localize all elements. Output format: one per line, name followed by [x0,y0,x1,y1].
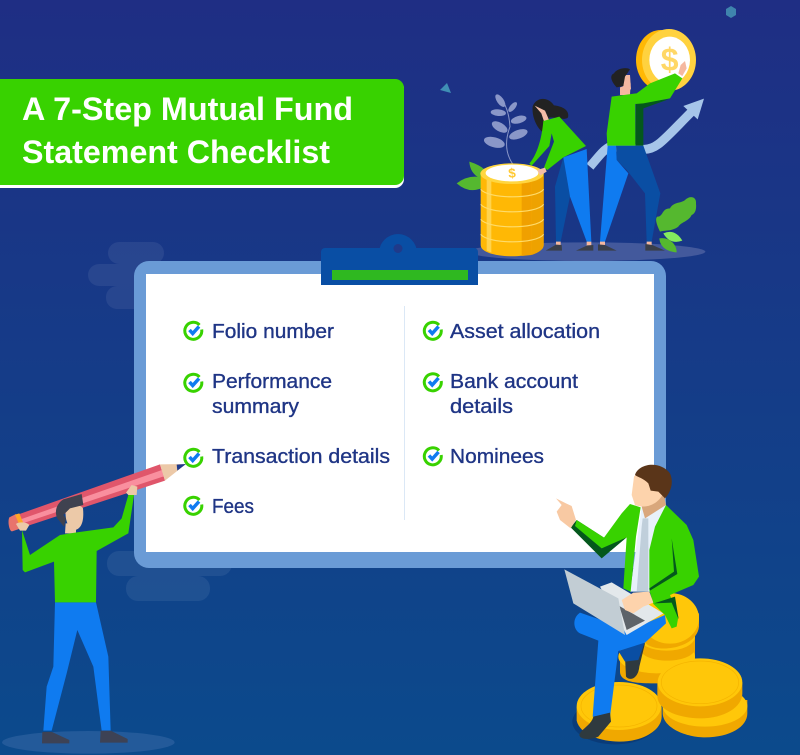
check icon: performance summary [185,374,202,391]
clipboard clip [321,234,478,285]
back shoe [625,640,645,679]
sweater [22,495,134,602]
jacket [571,504,699,628]
checklist: right column [424,320,600,468]
item: fees: Fees [212,495,254,518]
background clouds: lower left [107,551,232,601]
front shoe [579,713,611,739]
checklist: left column [185,320,390,518]
decorative triangle [440,83,451,93]
decorative hexagon [726,6,736,18]
pointing hand [556,498,576,528]
shoes [42,731,128,743]
ground shadow [2,731,175,754]
item: folio number: Folio number [212,320,334,343]
illustration: man carrying pencil [2,464,186,754]
typing hand [622,592,653,613]
shirt and tie [630,505,666,592]
item: performance summary: Performance [212,370,332,393]
man lifting coin [598,29,696,251]
illustration: man with laptop on coins [556,465,747,744]
pencil [9,464,186,531]
item: bank account details: Bank account [450,370,578,393]
woman [529,99,593,251]
item: asset allocation: Asset allocation [450,320,600,343]
green leaves behind coins [457,162,485,190]
clipboard board [134,261,666,568]
check icon: transaction details [185,449,202,466]
trousers [574,613,666,717]
neck [642,492,666,518]
illustration: team lifting coins, top right [457,29,705,261]
item: performance summary [212,370,332,418]
title banner [0,79,404,188]
item: bank account details [450,370,578,418]
neck and head [56,494,83,533]
item: performance summary: summary [212,395,300,418]
head [632,465,672,506]
coin stacks [572,593,747,744]
item: bank account details: details [450,395,513,418]
plant [483,93,529,165]
check icon: asset allocation [424,322,441,339]
item: transaction details: Transaction details [212,445,390,468]
check icon: folio number [185,322,202,339]
check icon: bank account details [424,374,441,391]
growth arrow [590,99,704,167]
laptop [564,569,663,635]
background clouds: upper left [88,242,166,309]
ground shadow [468,242,705,261]
title text: A 7-Step Mutual Fund [22,91,353,127]
coin stack: $ [508,165,517,181]
check icon: fees [185,497,202,514]
man lifting coin: $ [661,42,679,78]
coin stack [480,163,544,256]
item: nominees: Nominees [450,445,544,468]
trousers [43,602,111,731]
paper [146,274,654,552]
check icon: nominees [424,448,441,465]
column divider [404,306,405,520]
bush leaves [656,197,696,252]
hands [16,485,137,531]
title text [22,91,353,170]
title text: Statement Checklist [22,134,330,170]
